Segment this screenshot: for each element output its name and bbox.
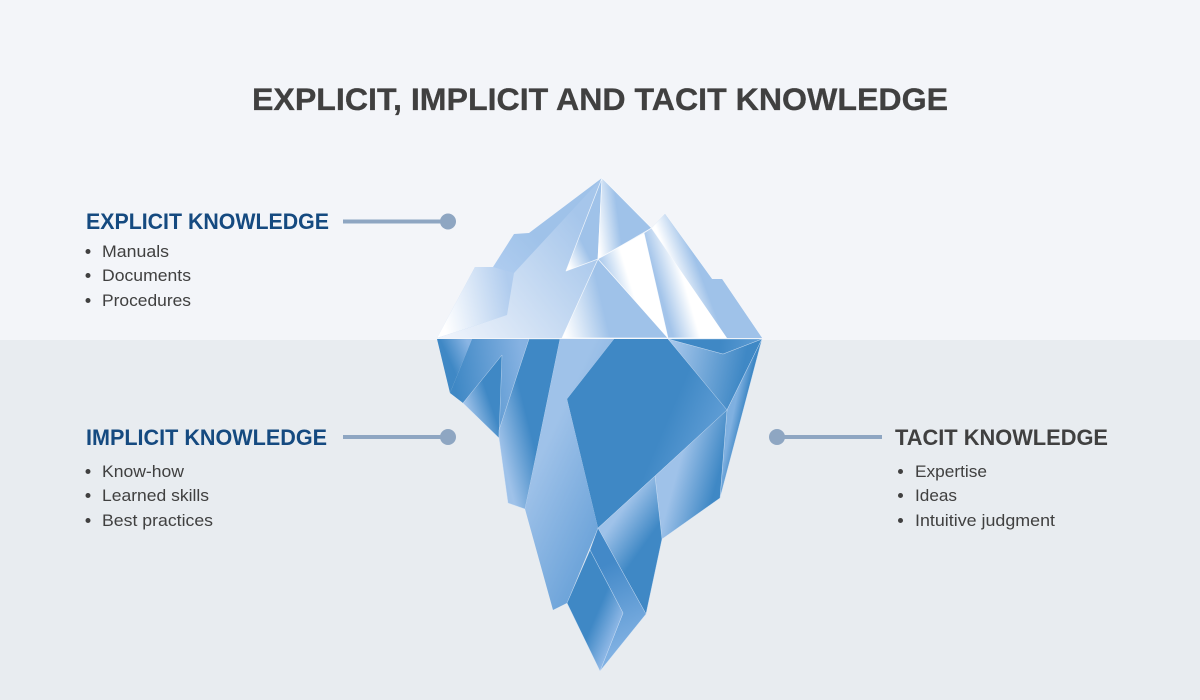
connector: tacit [769, 429, 882, 445]
list: tacit items [898, 463, 1055, 530]
list: implicit items: Best practices [102, 512, 213, 530]
list: explicit items: Manuals [102, 243, 169, 261]
list: tacit items: Intuitive judgment [915, 512, 1055, 530]
connector: explicit [343, 214, 456, 230]
heading: tacit knowledge: TACIT KNOWLEDGE [895, 425, 1108, 450]
list: explicit items: Procedures [102, 292, 191, 310]
list: implicit items: Learned skills [102, 487, 209, 505]
list: tacit items: Expertise [915, 463, 987, 481]
list: implicit items: Know-how [102, 463, 184, 481]
heading: explicit knowledge: EXPLICIT KNOWLEDGE [86, 209, 329, 234]
list: implicit items [86, 463, 213, 530]
connector: implicit [343, 429, 456, 445]
title: EXPLICIT, IMPLICIT AND TACIT KNOWLEDGE [252, 81, 948, 117]
panel: implicit knowledge [86, 425, 456, 530]
list: tacit items: Ideas [915, 487, 957, 505]
heading: implicit knowledge: IMPLICIT KNOWLEDGE [86, 425, 327, 450]
panel: tacit knowledge [769, 425, 1108, 530]
list: explicit items [86, 243, 191, 310]
panel: explicit knowledge [86, 209, 456, 310]
iceberg: part above water [437, 178, 762, 338]
background: below water [0, 340, 1200, 700]
iceberg: part below water [437, 339, 762, 671]
list: explicit items: Documents [102, 267, 191, 285]
background: above water [0, 0, 1200, 340]
iceberg illustration [437, 178, 762, 671]
